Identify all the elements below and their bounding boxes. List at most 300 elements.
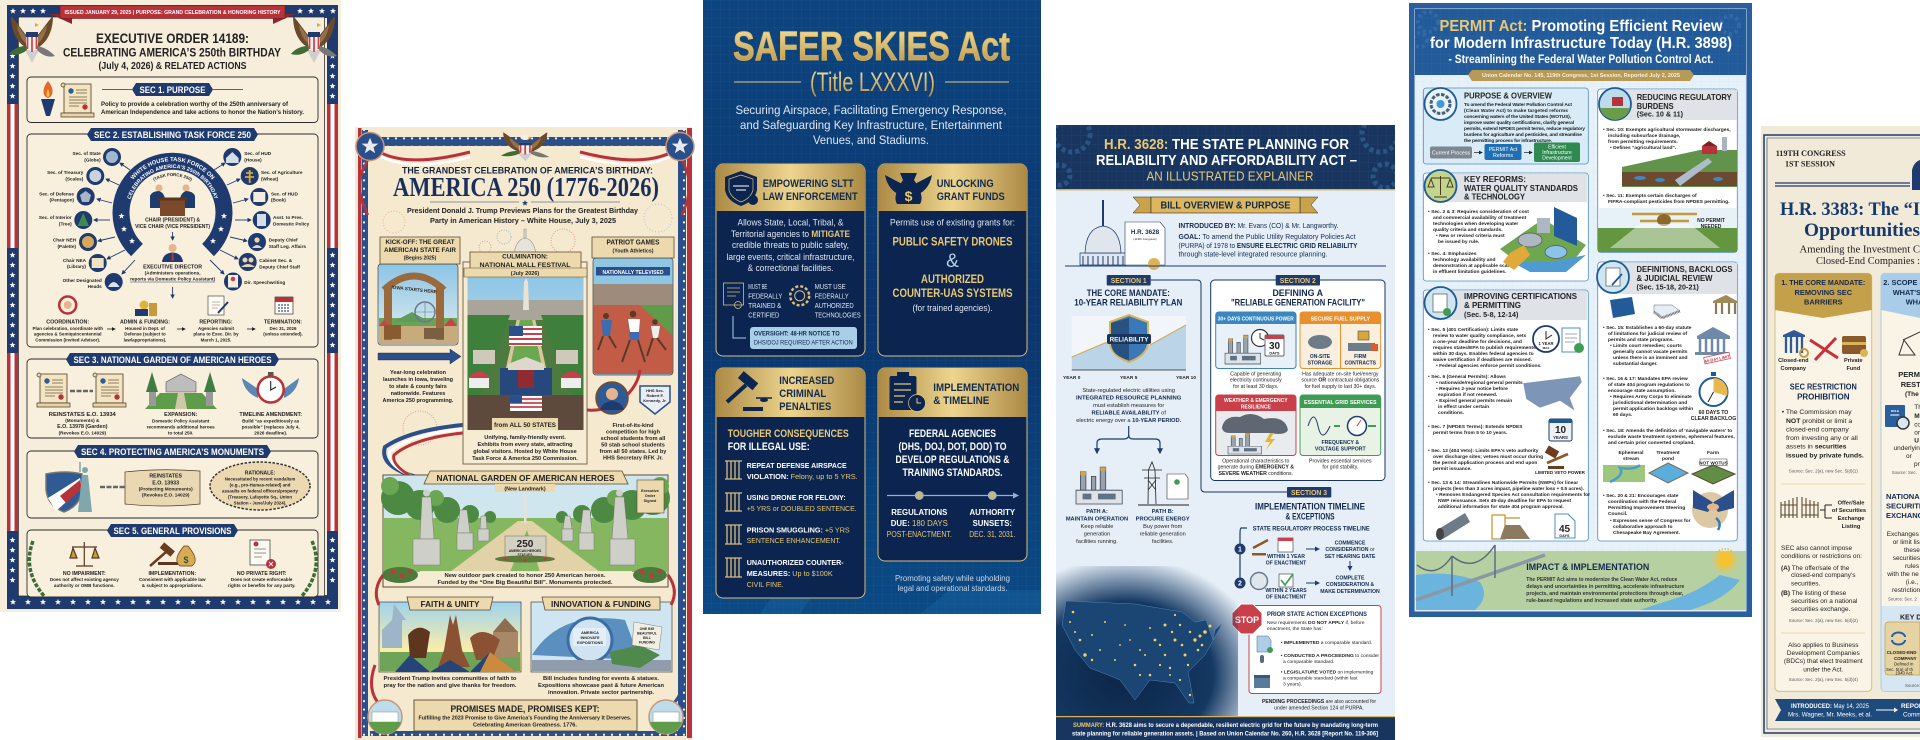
icon: scales xyxy=(1899,332,1920,355)
agencies right: Staff Leg. Affairs xyxy=(269,244,306,249)
title: SAFER SKIES Act xyxy=(733,23,1010,69)
footer: SUMMARY: H.R. 3628 aims to secure a dependable, resilient electric grid for the future by mandating long-term xyxy=(1073,722,1378,729)
text: path B: facilities. xyxy=(1152,539,1174,545)
text: sec 15: permits and state programs. xyxy=(1608,337,1674,343)
heading: & JUDICIAL REVIEW xyxy=(1636,274,1713,283)
banner: (Begins 2025) xyxy=(404,256,437,262)
text: America 250 programming. xyxy=(383,398,454,404)
text: conditions: conditions or restrictions on: xyxy=(1781,553,1862,560)
text: penalties: CIVIL FINE. xyxy=(747,580,784,589)
icon: bill document xyxy=(1125,222,1165,270)
icon: courthouse: 60-DAY LIMIT xyxy=(1704,354,1731,364)
text: reporting: March 1, 2025. xyxy=(201,337,231,342)
text: • Sec. 5 (401 Certification): Limits state xyxy=(1428,327,1518,333)
text: • Federal agencies enforce permit conditions. xyxy=(1436,363,1542,369)
caption band xyxy=(420,571,632,586)
icon: rule book: RULE xyxy=(1891,409,1899,413)
icons: water types: stream xyxy=(1623,456,1640,462)
text: sec 16: encourage state assumption. xyxy=(1608,388,1676,394)
icon: white house left xyxy=(368,700,402,734)
banner: BILL OVERVIEW & PURPOSE xyxy=(1160,200,1291,212)
text: sec 10 xyxy=(1603,127,1731,151)
text: penalties: MEASURES: Up to $100K xyxy=(747,569,833,578)
ribbon: Union Calendar No. 145, 119th Congress, 1st Session, Reported July 2, 2025 xyxy=(1482,73,1681,79)
text: national securities exchanges: SECURITI xyxy=(1886,501,1920,510)
text: & xyxy=(946,251,959,272)
step 1: SET HEARING DATE xyxy=(1325,554,1376,560)
illustration: crop duster xyxy=(1598,208,1737,252)
illustration: state fair: IOWA STARTS HERE xyxy=(391,285,437,294)
text: AUTHORIZED xyxy=(921,274,984,286)
header xyxy=(1883,278,1920,306)
icon: shield and liberty xyxy=(46,462,92,512)
text: no impairment xyxy=(50,571,119,588)
title: H.R. 3628: THE STATE PLANNING FOR xyxy=(1104,137,1349,153)
chart: reliability: YEAR 5 xyxy=(1120,375,1138,381)
heading pill: SEC 2. ESTABLISHING TASK FORCE 250 xyxy=(94,130,251,140)
text: conditions: securities. xyxy=(1791,580,1820,588)
panel: sec 1 purpose xyxy=(27,77,318,122)
subtitle: Party in American History – White House, July 3, 2025 xyxy=(430,216,616,225)
flow xyxy=(1430,142,1580,162)
text: technology availability and xyxy=(1433,257,1496,263)
text: DEVELOP REGULATIONS & xyxy=(896,454,1010,466)
flow: PERMIT Act xyxy=(1489,147,1518,153)
panel: improving certifications xyxy=(1423,287,1590,541)
text: COUNTER-UAS SYSTEMS xyxy=(892,288,1013,300)
text: no private right: NO PRIVATE RIGHT: xyxy=(237,571,287,577)
heading: SEC RESTRICTION xyxy=(1790,383,1857,392)
poster: Executive Order 14189 xyxy=(0,0,341,612)
scroll: E.O. 13933: (Protecting Monuments) xyxy=(139,486,193,491)
heading: PROHIBITION xyxy=(1797,392,1850,402)
text: sec 20: collaborative approach to xyxy=(1613,524,1673,530)
footer text: Promoting safety while upholding xyxy=(895,574,1010,583)
icon: denied document xyxy=(250,540,276,569)
title: PERMIT Act: Promoting Efficient Review xyxy=(1440,18,1723,35)
text: admin: Housed in Dept. of xyxy=(125,326,165,331)
text: no impairment: authority or OMB functions. xyxy=(54,583,115,588)
heading xyxy=(1636,265,1733,292)
banner: INNOVATION & FUNDING xyxy=(551,600,651,609)
heading: & PERMITTING xyxy=(1464,301,1521,310)
text: New requirements DO NOT APPLY if, before xyxy=(1267,620,1365,626)
card: weather resilience xyxy=(1216,395,1296,456)
title: - Streamlining the Federal Water Pollution Control Act. xyxy=(1448,52,1714,66)
text: pending: under amended Section 124 of PURPA. xyxy=(1274,706,1364,712)
text: introduced and goal: GOAL: To amend the Public Utility Regulatory Policies Act xyxy=(1178,234,1356,241)
text: no private right: rights or benefits for any party. xyxy=(228,583,295,588)
text: pending xyxy=(1262,699,1376,712)
text: requires states/EPA to publish requirements xyxy=(1433,345,1536,351)
icon: white house right xyxy=(649,700,683,734)
icons: water types: NOT WOTUS xyxy=(1699,460,1728,465)
task force ring: (TASK FORCE 250) xyxy=(153,173,192,182)
text: timeline: TIMELINE AMENDMENT: xyxy=(239,412,302,418)
card: secure fuel: SECURE FUEL SUPPLY xyxy=(1311,316,1370,322)
text: national securities exchanges: or limit lis xyxy=(1893,539,1920,546)
icon: capitol xyxy=(1912,160,1920,190)
text: BDCs: (BDCs) that elect treatment xyxy=(1784,658,1863,665)
panel: impact and implementation xyxy=(1416,545,1746,610)
agencies left xyxy=(39,148,123,291)
heading: WATER QUALITY STANDARDS xyxy=(1464,184,1578,193)
text: Unifying, family-friendly event. xyxy=(484,435,566,441)
text: • Removes Endangered Species Act consultation requirements for xyxy=(1436,492,1590,498)
text: HHS Secretary RFK Jr. xyxy=(603,456,663,462)
footer text xyxy=(895,574,1010,593)
banner: CULMINATION: xyxy=(502,254,548,260)
agencies left: Heads xyxy=(88,284,102,289)
text: admin: law/appropriations). xyxy=(124,337,166,342)
header xyxy=(1056,125,1395,190)
callout: promises made promises kept: PROMISES MADE, PROMISES KEPT: xyxy=(450,704,600,715)
heading: "RELIABLE GENERATION FACILITY" xyxy=(1231,298,1365,308)
text: expansion: to total 250. xyxy=(168,430,193,435)
text: national securities exchanges: restriction xyxy=(1892,587,1920,594)
text: national securities exchanges: Source: Sec. 2 xyxy=(1888,596,1917,602)
milestone: regulations: DUE: 180 DAYS xyxy=(891,519,948,528)
text: for at least 30 days. xyxy=(1233,384,1278,390)
chart: reliability: RELIABILITY xyxy=(1110,336,1149,344)
text: trained: CERTIFIED xyxy=(748,312,779,320)
key definitions: 1940 Act. xyxy=(1895,671,1913,676)
text: issued by private funds. xyxy=(1786,452,1864,460)
card: essential grid: FREQUENCY & xyxy=(1321,440,1359,446)
text: termination: TERMINATION: xyxy=(264,320,302,326)
text: • Sec. 7 (NPDES Terms): Extends NPDES xyxy=(1428,424,1523,430)
text: penalties: SENTENCE ENHANCEMENT. xyxy=(747,536,841,545)
text: permitted: Source: Sec. xyxy=(1892,470,1917,475)
illustration: track xyxy=(593,258,673,375)
text: Exhibits from every state, attracting xyxy=(477,442,573,448)
text: sec 16: 60 days. xyxy=(1613,412,1633,418)
subheading: FOR ILLEGAL USE: xyxy=(728,441,810,453)
text: implementation: IMPLEMENTATION: xyxy=(148,571,196,577)
header xyxy=(937,178,1005,203)
text: admin xyxy=(120,320,170,342)
arrows: split xyxy=(1097,426,1160,453)
title xyxy=(1096,137,1357,184)
text xyxy=(472,435,578,462)
seal: rationale: RATIONALE: xyxy=(245,470,276,476)
text: Task Force & America 250 Commission. xyxy=(472,456,578,462)
icon: clipboard xyxy=(890,372,926,412)
icon: water gear xyxy=(1424,88,1456,120)
text: permit terms from 5 to 10 years. xyxy=(1433,430,1508,436)
text: First-of-its-kind xyxy=(612,423,654,429)
header: EMPOWERING SLTT xyxy=(763,178,854,190)
diagram: closed-end to private fund: Closed-end xyxy=(1778,358,1809,364)
text: penalties: +5 YRS or DOUBLED SENTENCE. xyxy=(747,504,857,513)
icon: laurels xyxy=(29,541,316,596)
agencies left: (Library) xyxy=(67,264,86,269)
text: • Sec. 6 (General Permits): Allows xyxy=(1428,374,1506,380)
flow: Infrastructure xyxy=(1542,150,1572,156)
key definitions xyxy=(1885,614,1920,688)
text: path B: PATH B: xyxy=(1152,509,1174,515)
icons: section 13 row: 45 xyxy=(1559,524,1570,535)
text: sec 20 xyxy=(1603,493,1691,536)
icon: chair and vice chair at table xyxy=(150,184,195,216)
step 2 xyxy=(1234,572,1380,600)
text: no impairment: NO IMPAIRMENT: xyxy=(63,571,106,577)
card: weather resilience: RESILIENCE xyxy=(1241,404,1271,410)
footer ribbon: Mrs. Wagner, Mr. Meeks, et al. xyxy=(1788,712,1872,719)
agencies left: Sec. of Interior xyxy=(39,215,72,220)
text: be issued by rule. xyxy=(1438,239,1480,245)
step 2: COMPLETE xyxy=(1336,576,1365,582)
text: a comparable standard. xyxy=(1283,659,1334,665)
icon: chain xyxy=(100,486,125,488)
panel: exceptions xyxy=(1232,604,1381,694)
text: • The Commission may xyxy=(1782,409,1852,416)
text: technologies: TECHNOLOGIES xyxy=(815,312,861,320)
text: (for trained agencies). xyxy=(912,303,992,313)
title: AMERICA 250 (1776-2026) xyxy=(393,172,659,202)
seal: rationale: assaults on federal officers/property xyxy=(222,489,298,494)
banner: NATIONAL GARDEN OF AMERICAN HEROES xyxy=(436,473,615,483)
text xyxy=(1218,458,1294,477)
session label: 119TH CONGRESS xyxy=(1776,149,1846,158)
caption xyxy=(538,676,665,696)
heading: DEFINING A xyxy=(1272,288,1324,298)
illustration: expo and money: FUNDING xyxy=(639,640,655,644)
card: secure fuel: FIRM xyxy=(1354,354,1366,360)
heading: IMPROVING CERTIFICATIONS xyxy=(1464,292,1578,301)
icons: water types: Farm xyxy=(1707,450,1720,456)
header xyxy=(763,178,858,203)
text: sec 20: coordination with the Federal xyxy=(1608,499,1677,505)
text: 50 stab school students xyxy=(601,442,665,448)
agencies right: Domestic Policy xyxy=(273,221,310,226)
text: permitted: pr xyxy=(1914,461,1920,468)
key definitions: CLOSED-END xyxy=(1887,650,1917,655)
panel: implementation and timeline xyxy=(878,368,1027,561)
title: (Title LXXXVI) xyxy=(810,67,935,97)
text: path A xyxy=(1066,509,1128,545)
callout: promises made promises kept: Fulfilling the 2023 Promise to Give America’s Founding the Anniversary It Deserves. xyxy=(418,716,632,722)
banner: FAITH & UNITY xyxy=(420,600,480,609)
title xyxy=(733,23,1010,97)
text: BDCs: Source: Sec. 2(a), new Sec. 5(d)(4) xyxy=(1789,677,1858,682)
panel: patriot games xyxy=(587,237,674,462)
header xyxy=(933,382,1019,407)
text: sec 11 xyxy=(1603,193,1730,205)
panel: criminal penalties xyxy=(716,368,865,598)
text xyxy=(1428,209,1529,275)
text: pending: PENDING PROCEEDINGS are also accounted for xyxy=(1262,699,1376,705)
text: sec 18: and certain prior converted cropland. xyxy=(1608,440,1695,446)
text: sec 11: • Sec. 11: Exempts certain discharges of xyxy=(1603,193,1697,199)
text: • Expired general permits remain xyxy=(1436,398,1512,404)
text: sec 18: exclude waste treatment systems, ephemeral features, xyxy=(1608,434,1735,440)
text: national securities exchanges xyxy=(1886,492,1920,602)
text: path A: PATH A: xyxy=(1086,509,1108,515)
text: from all 50 states. Led by xyxy=(600,449,667,455)
callout: oversight xyxy=(750,327,857,349)
diagram: closed-end to private fund xyxy=(1778,330,1868,372)
text: sec 15: generally cannot vacate permits xyxy=(1613,349,1688,355)
title xyxy=(1780,199,1920,241)
icon: path A factory xyxy=(1076,467,1122,504)
pill: SECTION 2 xyxy=(1280,276,1316,285)
text: termination: Dec 31, 2026 xyxy=(269,326,297,331)
step 1 xyxy=(1234,538,1376,566)
text: in effluent limitation guidelines. xyxy=(1433,269,1507,275)
pill: SECTION 1 xyxy=(1111,276,1147,285)
panel: definitions xyxy=(1597,261,1737,541)
text xyxy=(1076,388,1182,424)
footer text: legal and operational standards. xyxy=(898,584,1008,593)
heading: 10-YEAR RELIABILITY PLAN xyxy=(1074,298,1182,308)
text: sec 18 xyxy=(1603,428,1735,446)
text: national securities exchanges: these xyxy=(1904,547,1920,554)
task force ring: CELEBRATING AMERICA’S 250th BIRTHDAY xyxy=(127,164,218,199)
agencies right xyxy=(223,148,310,290)
scroll: E.O. 13933 xyxy=(125,470,200,506)
text: the permitting process for infrastructure. xyxy=(1464,138,1553,144)
text xyxy=(1309,458,1372,471)
banner: NATIONAL MALL FESTIVAL xyxy=(480,262,570,269)
text: Permits use of existing grants for: xyxy=(890,218,1015,228)
header xyxy=(1781,278,1865,306)
text: Has adequate on-site fuel/energy xyxy=(1302,372,1379,378)
text: over discharge sites; vetoes must occur during xyxy=(1433,454,1543,460)
title: CELEBRATING AMERICA’S 250th BIRTHDAY xyxy=(63,48,281,60)
scroll: E.O. 13933: (Revokes E.O. 14029) xyxy=(142,492,190,497)
ribbon swoosh xyxy=(384,425,463,486)
text: • nationwide/regional general permits. xyxy=(1436,380,1525,386)
text: permitted: or xyxy=(1906,453,1913,460)
icons: section 5 xyxy=(1533,326,1584,353)
milestone: sunset xyxy=(969,508,1016,539)
heading pill: SEC 4. PROTECTING AMERICA’S MONUMENTS xyxy=(81,447,264,457)
illustration: field and drain xyxy=(1622,137,1737,187)
ornamental flag border xyxy=(7,5,338,609)
milestone: regulations xyxy=(887,508,952,539)
text: sec 20: • Expresses sense of Congress for xyxy=(1610,518,1691,524)
illustration: sun xyxy=(1714,549,1736,571)
card: secure fuel: ON-SITE xyxy=(1310,354,1331,360)
text: sec 16 xyxy=(1603,376,1693,418)
text: national securities exchanges: NATIONA xyxy=(1886,492,1920,501)
title: EXECUTIVE ORDER 14189: xyxy=(96,30,249,46)
text: coordination xyxy=(32,320,103,342)
text: closed-end company xyxy=(1786,426,1849,434)
poster: PERMIT Act xyxy=(1409,3,1752,617)
subtitle xyxy=(407,206,638,225)
text: path B xyxy=(1136,509,1190,545)
text: projects, and maintain environmental protections through clear, xyxy=(1526,591,1684,597)
text: technologies: FEDERALLY xyxy=(815,294,849,301)
step 2: WITHIN 2 YEARS xyxy=(1265,588,1307,594)
text: Territorial agencies to MITIGATE xyxy=(731,229,850,239)
ribbon xyxy=(1468,70,1694,81)
title: AN ILLUSTRATED EXPLAINER xyxy=(1146,170,1314,184)
text: & correctional facilities. xyxy=(748,263,834,273)
illustration: expo and money: BEAUTIFUL xyxy=(637,632,658,636)
text: enactment, the State has: xyxy=(1267,626,1323,632)
illustration: expo and money: INNOVATE xyxy=(580,636,600,640)
text: reporting: REPORTING: xyxy=(199,320,233,326)
text: within 30 days. Enables federal agencies to xyxy=(1432,351,1534,357)
icon: eagle right xyxy=(291,16,337,63)
icon: scales xyxy=(70,542,99,566)
portrait: RFK Jr. xyxy=(596,382,628,414)
text: sec 20: Chesapeake Bay Agreement. xyxy=(1613,530,1681,536)
pill: SECTION 3 xyxy=(1291,488,1327,497)
banner xyxy=(592,237,674,258)
heading: KEY REFORMS: xyxy=(1464,175,1526,184)
arrow xyxy=(733,316,746,338)
text: penalties: USING DRONE FOR FELONY: xyxy=(747,493,846,502)
text: waive certification if deadlines are missed. xyxy=(1432,357,1533,363)
text: electric energy over a 10-YEAR PERIOD. xyxy=(1076,418,1182,424)
text: • Sec. 4: Emphasizes xyxy=(1428,251,1477,257)
callout: promises made promises kept xyxy=(414,700,637,731)
icons: section 13 row xyxy=(1436,513,1575,540)
text: rule-based regulations and increased state authority. xyxy=(1526,598,1658,604)
text: sec 15 xyxy=(1603,325,1692,367)
illustration: crop duster: NO PERMIT xyxy=(1697,218,1725,224)
task force ring: WHITE HOUSE TASK FORCE ON xyxy=(130,157,215,180)
decorative fireworks xyxy=(383,204,672,445)
illustration: state fair xyxy=(378,264,458,345)
caption: innovation. Private sector partnership. xyxy=(548,690,654,696)
text: • Sec. 2 & 3: Requires consideration of cost xyxy=(1428,209,1529,215)
step 1: CONSIDERATION or xyxy=(1325,547,1375,553)
agencies right: Deputy Chief xyxy=(269,238,298,243)
ornamental border xyxy=(356,128,694,738)
text: Policy to provide a celebration worthy of the 250th anniversary of xyxy=(101,101,289,108)
card: secure fuel: CONTRACTS xyxy=(1345,360,1377,366)
text: • New or revised criteria must xyxy=(1436,233,1505,239)
footer: state planning for reliable generation assets. | Based on Union Calendar No. 260, H.R. 3628 [Report No. 119-306] xyxy=(1072,730,1378,738)
text: conditions: securities on a national xyxy=(1791,598,1858,605)
title xyxy=(1430,18,1732,66)
step 1: OF ENACTMENT xyxy=(1266,560,1307,566)
text: technologies xyxy=(815,284,861,320)
text xyxy=(101,101,304,116)
text: conditions: closed-end company's xyxy=(1791,572,1856,579)
text xyxy=(1230,372,1282,390)
text: sec 20: Permitting Improvement Steering xyxy=(1608,505,1685,511)
text: permits, extend NPDES permit terms, reduce regulatory xyxy=(1464,126,1585,132)
text: chair: VICE CHAIR (VICE PRESIDENT) xyxy=(135,224,210,230)
icon: capitol xyxy=(1080,200,1126,265)
header: LAW ENFORCEMENT xyxy=(763,191,858,203)
header: UNLOCKING xyxy=(937,178,994,190)
agencies right: Deputy Chief Staff xyxy=(259,264,300,270)
step 1: COMMENCE xyxy=(1335,540,1366,546)
icon: document xyxy=(1597,261,1629,293)
caption: pray for the nation and give thanks for freedom. xyxy=(384,683,517,689)
text: implementation: Consistent with applicable law xyxy=(139,577,206,582)
text: sec 15: • Sec. 15: Establishes a 60-day statute xyxy=(1603,325,1692,331)
text: termination: (unless extended). xyxy=(263,332,303,337)
text: NWP reissuance. Sets 45-day deadline for EPA to request xyxy=(1438,498,1571,504)
text xyxy=(1428,327,1590,510)
agencies left: Chair NEH xyxy=(53,238,77,243)
icons: water types: pond xyxy=(1662,456,1674,462)
illustration: expo and money: EXPOSITIONS xyxy=(577,641,603,645)
text: path B: reliable generation xyxy=(1140,532,1186,538)
icons: section 5: 1 YEAR xyxy=(1538,341,1554,346)
subheading xyxy=(728,428,849,453)
icon: bill document: (119th Congress) xyxy=(1134,237,1156,241)
caption xyxy=(438,573,613,586)
